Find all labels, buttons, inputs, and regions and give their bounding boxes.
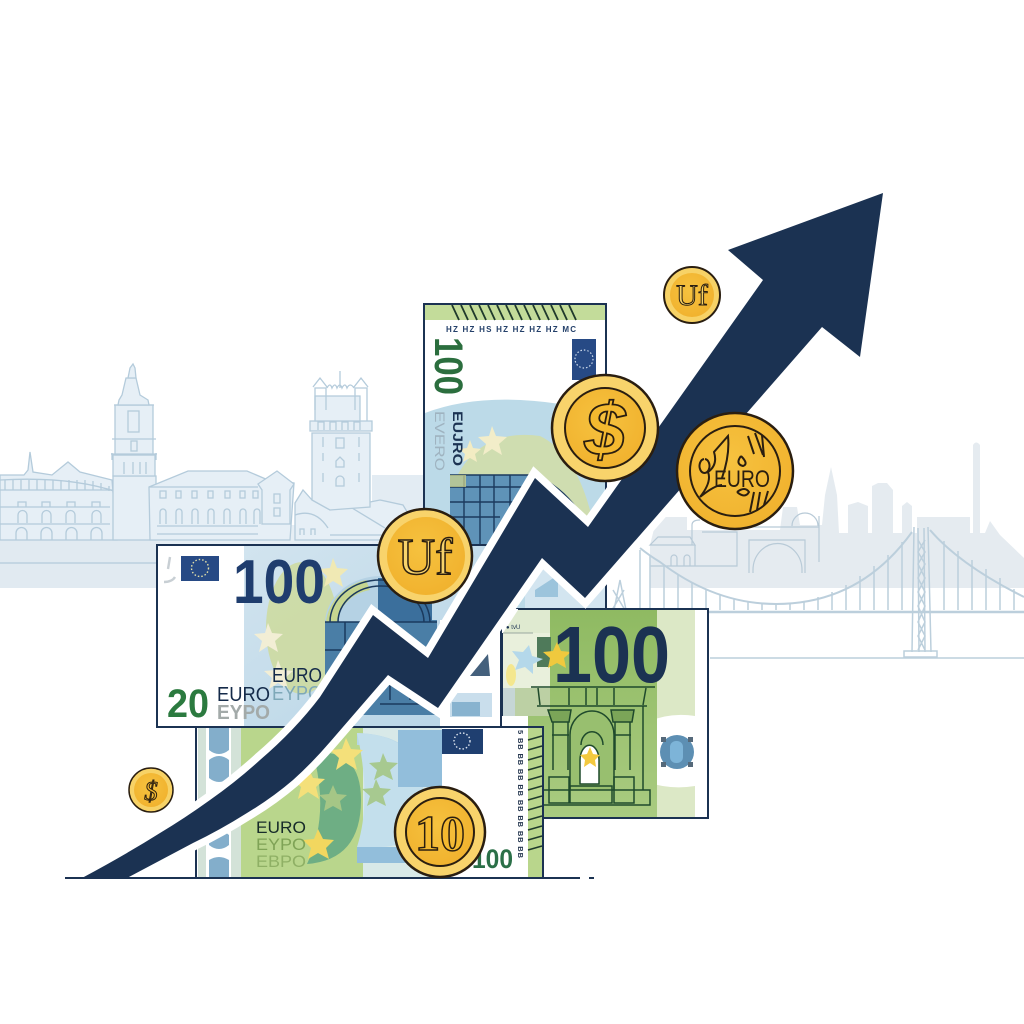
banknote: left blue 100: EYPO [272, 683, 322, 705]
banknote: right green 100: ● tvU [506, 625, 520, 631]
note outline [502, 609, 708, 818]
100 heading: 100 [553, 610, 670, 699]
coin: ten [395, 787, 485, 877]
banknote: bottom green and blue: EYPO [256, 835, 306, 854]
euro labels: EURO [256, 818, 306, 837]
palace building [149, 471, 294, 540]
banknote: left blue 100: EURO [217, 684, 270, 706]
100 label: 100 [472, 844, 513, 874]
microtext row: HZ HZ HS HZ HZ HZ HZ MC [446, 325, 576, 334]
coin: small dollar [129, 768, 173, 812]
coin: script symbol [378, 509, 472, 603]
banknote: top vertical 100 [424, 304, 606, 609]
EU flag [572, 339, 596, 380]
stars [319, 558, 348, 587]
100 heading: 100 [233, 548, 325, 617]
20 euro labels: 20 [167, 682, 209, 726]
silhouette skyline [650, 442, 1024, 588]
right city skyline and bridge [608, 442, 1024, 658]
blue and green art [425, 400, 605, 608]
banknote: left blue 100: EURO [272, 665, 322, 687]
clock tower [111, 364, 157, 540]
white right panel [440, 620, 500, 726]
green band [528, 610, 657, 817]
blue panel [244, 546, 500, 726]
coin: large dollar [552, 375, 658, 481]
rotunda building [0, 452, 117, 540]
green oval [266, 562, 338, 694]
arch window [325, 576, 437, 715]
blue seal [660, 735, 694, 769]
rising zigzag arrow [82, 193, 883, 878]
banknote: left blue 100: EYPO [217, 702, 270, 724]
green panel [241, 728, 363, 877]
coin: small top: Uf [676, 279, 708, 312]
coin: ten: 10 [415, 805, 465, 861]
vertical 100: 100 [426, 337, 470, 395]
vertical euro text: EUJRO [450, 411, 466, 466]
banknote: top vertical 100: EVERO [432, 411, 448, 471]
coin: small dollar: $ [144, 776, 158, 806]
left security strip [198, 728, 206, 877]
coin: euro map: EURO [714, 466, 770, 493]
outlined buildings [650, 513, 819, 573]
green edge with hatch [528, 728, 542, 877]
coin: large dollar: $ [583, 388, 626, 471]
pale panels [503, 633, 551, 688]
banknote: bottom green and blue: EBPO [256, 852, 306, 871]
banknote: right green 100 [502, 609, 708, 818]
banknote: bottom green and blue [196, 727, 543, 878]
left city skyline [0, 364, 430, 588]
coin: script symbol: Uf [398, 529, 453, 586]
bridge tower [904, 527, 937, 657]
coin: small top [664, 267, 720, 323]
arch monument [531, 687, 655, 805]
suspension bridge [608, 527, 1024, 658]
banknote: left blue 100 [157, 545, 501, 727]
ground band [0, 540, 160, 588]
vertical microtext: 5 BB BB BB BB BB BB BB BB [516, 730, 525, 859]
stars [330, 738, 363, 770]
EU flag [442, 729, 483, 754]
pale blue arch [357, 733, 423, 863]
Belem style tower [310, 371, 372, 510]
green strip [425, 305, 605, 320]
window grid [450, 475, 590, 560]
left art [537, 637, 551, 667]
baseline [65, 877, 594, 879]
dark green crescent [307, 753, 361, 864]
coin: euro map [677, 413, 793, 529]
EU flag [181, 556, 219, 581]
hill houses [295, 475, 425, 545]
